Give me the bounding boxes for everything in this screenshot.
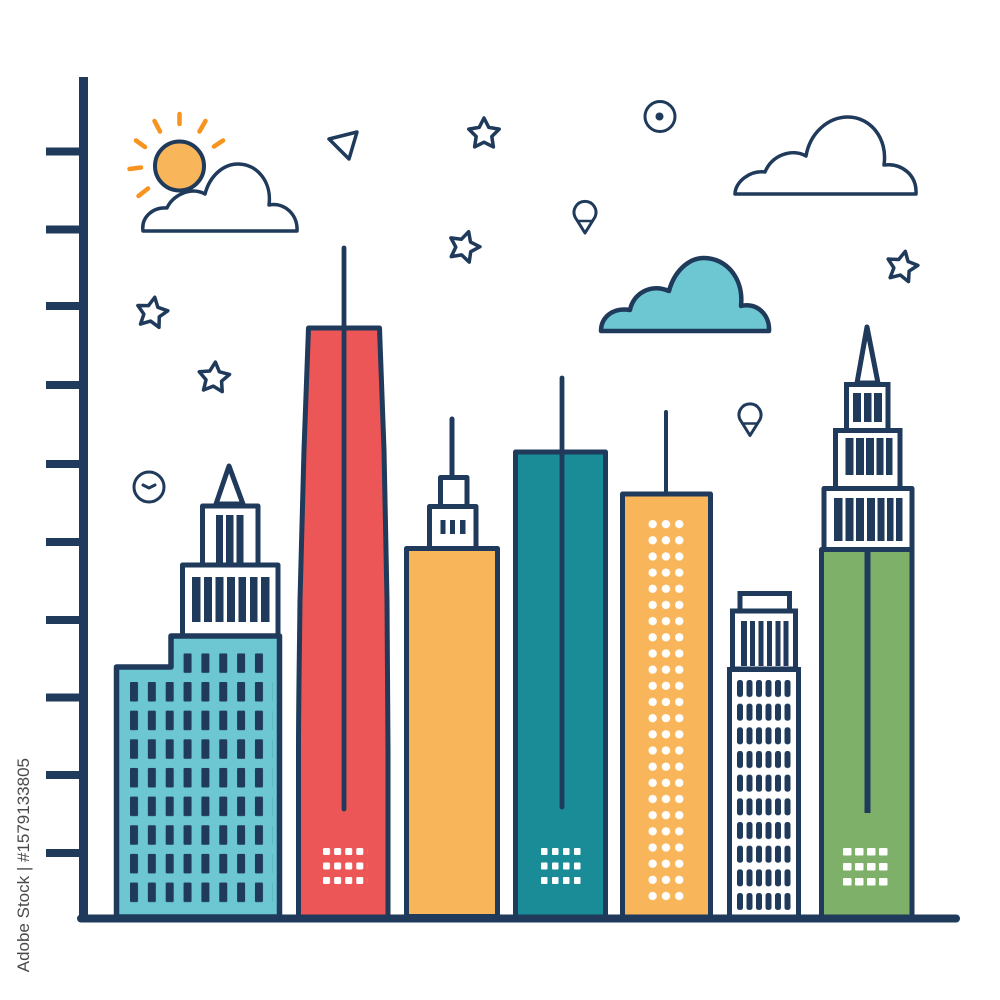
dot windows	[646, 516, 686, 904]
centre line	[864, 552, 870, 813]
icon: star	[446, 227, 483, 264]
green body	[822, 550, 912, 917]
windows	[541, 848, 580, 892]
icon: map pin	[574, 201, 596, 233]
antenna	[450, 419, 454, 478]
icon: triangle	[329, 132, 357, 159]
red body	[298, 328, 388, 917]
building 5: orange dotted tower	[622, 412, 710, 917]
top tier	[202, 506, 258, 572]
icon: sun with rays	[130, 114, 223, 196]
windows	[737, 680, 794, 910]
top box	[440, 478, 467, 508]
middle tier	[732, 611, 796, 669]
lower tier	[824, 488, 912, 550]
axis: vertical and horizontal with ticks	[46, 77, 956, 918]
top tier	[846, 384, 888, 430]
icon: cloud top right	[735, 117, 916, 194]
windows	[130, 653, 273, 911]
antenna	[342, 248, 346, 809]
top box	[740, 594, 790, 611]
icon: teal cloud	[601, 258, 769, 331]
windows	[323, 848, 367, 892]
windows	[843, 848, 891, 893]
middle tier	[182, 565, 278, 636]
orange body	[406, 548, 498, 916]
antenna	[664, 412, 668, 494]
building 1: blue office block with white tower	[116, 466, 280, 917]
icon: target circle	[645, 102, 675, 132]
teal body	[516, 452, 606, 917]
building 3: orange tower	[406, 419, 498, 916]
antenna	[560, 378, 564, 807]
blue body	[116, 636, 280, 917]
spire	[857, 327, 878, 383]
icon: cloud beside sun	[143, 164, 297, 231]
white body	[730, 670, 798, 917]
orange body	[622, 494, 710, 917]
icon: clock	[134, 472, 164, 502]
building 4: teal tower	[516, 378, 606, 917]
middle tier	[836, 430, 900, 488]
building 2: red tapered tower	[298, 248, 388, 917]
middle box	[430, 506, 476, 548]
building 6: white tower	[730, 594, 798, 917]
source label: Adobe Stock | #1579133805	[14, 758, 33, 972]
icon: map pin	[739, 404, 761, 436]
building 7: green tower with white tiers	[822, 327, 912, 917]
spire	[216, 466, 243, 504]
icon: star	[884, 248, 920, 283]
icon: star	[135, 295, 170, 328]
icon: star	[198, 361, 231, 392]
icon: star	[469, 118, 499, 147]
